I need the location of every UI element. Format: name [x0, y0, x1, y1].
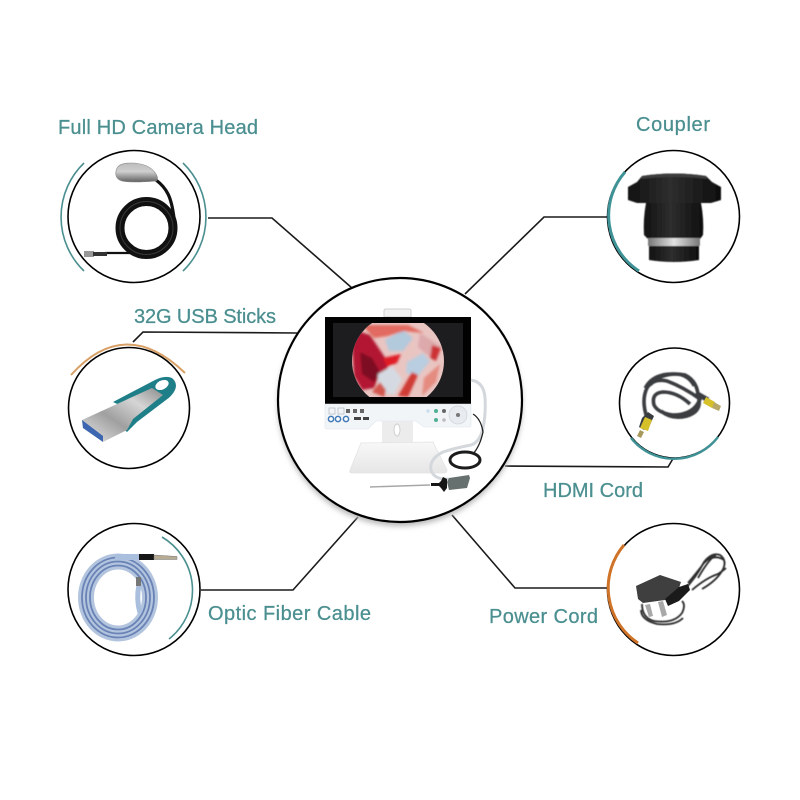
- monitor handle: [384, 309, 411, 317]
- teal arc: [162, 537, 193, 639]
- teal arc: [609, 172, 639, 271]
- monitor stand: [382, 420, 413, 447]
- heading: HDMI Cord: HDMI Cord: [543, 480, 643, 502]
- cables and endoscope: [370, 380, 485, 487]
- main circle: endoscopy system: [278, 278, 522, 526]
- panel: coupler: [608, 150, 740, 282]
- icon: power cord: [641, 554, 726, 624]
- heading: Power Cord: Power Cord: [489, 606, 598, 628]
- monitor base: [350, 442, 447, 473]
- panel: optic fiber cable: [68, 524, 200, 656]
- endoscopic image: [352, 323, 444, 397]
- orange arc: [608, 545, 638, 643]
- icon: USB stick: [82, 377, 176, 442]
- heading: Full HD Camera Head: Full HD Camera Head: [58, 117, 258, 139]
- icon: plug: [636, 575, 681, 603]
- heading: Coupler: Coupler: [636, 114, 710, 136]
- heading: 32G USB Sticks: 32G USB Sticks: [134, 306, 276, 328]
- panel: HDMI cord: [620, 348, 730, 459]
- monitor screen: [325, 315, 471, 407]
- icon: coupler: [628, 174, 721, 262]
- icon: coiled fiber: [82, 557, 154, 638]
- control panel: [325, 404, 471, 429]
- teal arc: [631, 437, 718, 459]
- orange arc: [71, 344, 185, 375]
- panel: USB stick: [68, 344, 190, 468]
- panel: camera head: [61, 150, 206, 282]
- panel: power cord: [608, 524, 740, 656]
- connector lines: [133, 217, 674, 590]
- teal arcs: [61, 163, 84, 271]
- icon: camera head body: [116, 163, 158, 182]
- icon: HDMI cable: [644, 374, 708, 418]
- heading: Optic Fiber Cable: Optic Fiber Cable: [208, 603, 371, 625]
- icon: coiled camera cable: [105, 180, 174, 254]
- accessories diagram: [60, 116, 740, 656]
